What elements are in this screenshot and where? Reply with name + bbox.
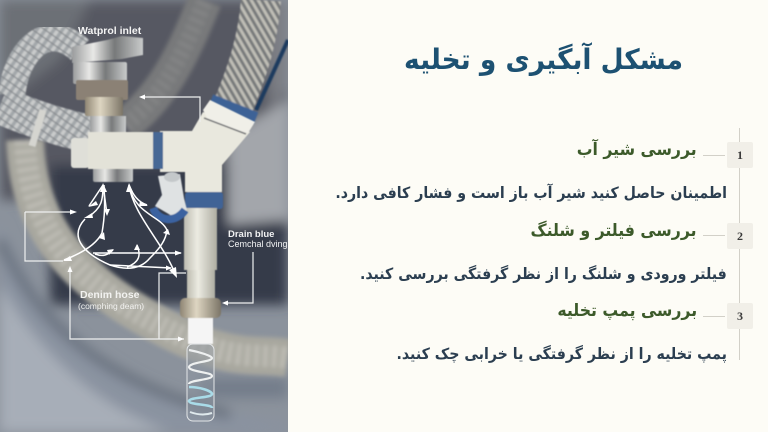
- transparent filter with spiral: [187, 344, 214, 421]
- label: Drain blue: Drain blue: [228, 229, 274, 240]
- step 2 body: فیلتر ورودی و شلنگ را از نظر گرفتگی بررسی کنید.: [360, 265, 727, 283]
- step 3 body: پمپ تخلیه را از نظر گرفتگی یا خرابی چک کنید.: [397, 345, 727, 363]
- step 3 number: [727, 303, 753, 329]
- step 1 number: 1: [737, 148, 743, 162]
- white T fitting with drain pipe: [71, 100, 255, 344]
- step 1 heading: بررسی شیر آب: [577, 140, 697, 160]
- step 2 heading: بررسی فیلتر و شلنگ: [531, 221, 697, 241]
- small side nozzle: [153, 172, 187, 219]
- right braided hose: [211, 0, 288, 118]
- step 1 number: [727, 142, 753, 168]
- arrowheads: [63, 94, 228, 342]
- label: Denim hose: Denim hose: [80, 289, 140, 301]
- inlet valve fitting: [72, 36, 143, 182]
- step 3 connector: [703, 316, 725, 317]
- label: Drain blue: [228, 229, 288, 249]
- inlet braided hose: [0, 38, 95, 146]
- label: Denim hose: (comphing deam): [78, 301, 144, 311]
- step 2 number: [727, 223, 753, 249]
- background drain hose: [25, 0, 288, 358]
- flow arrows: [64, 185, 181, 276]
- timeline vertical line: [739, 128, 740, 360]
- photo background: [0, 0, 288, 432]
- step 2 number: 2: [737, 229, 743, 243]
- label: Denim hose: [78, 289, 144, 311]
- label: Drain blue: Cemchal dving: [228, 239, 288, 249]
- step 3 heading: بررسی پمپ تخلیه: [557, 301, 697, 321]
- step 1 body: اطمینان حاصل کنید شیر آب باز است و فشار کافی دارد.: [335, 184, 727, 202]
- title: مشکل آبگیری و تخلیه: [404, 43, 683, 76]
- leader lines: [25, 97, 253, 339]
- step 1 connector: [703, 155, 725, 156]
- step 2 connector: [703, 235, 725, 236]
- label: Watprol inlet: Watprol inlet: [78, 25, 142, 37]
- step 3 number: 3: [737, 309, 743, 323]
- panel: washing machine plumbing photo with labels: [0, 0, 288, 432]
